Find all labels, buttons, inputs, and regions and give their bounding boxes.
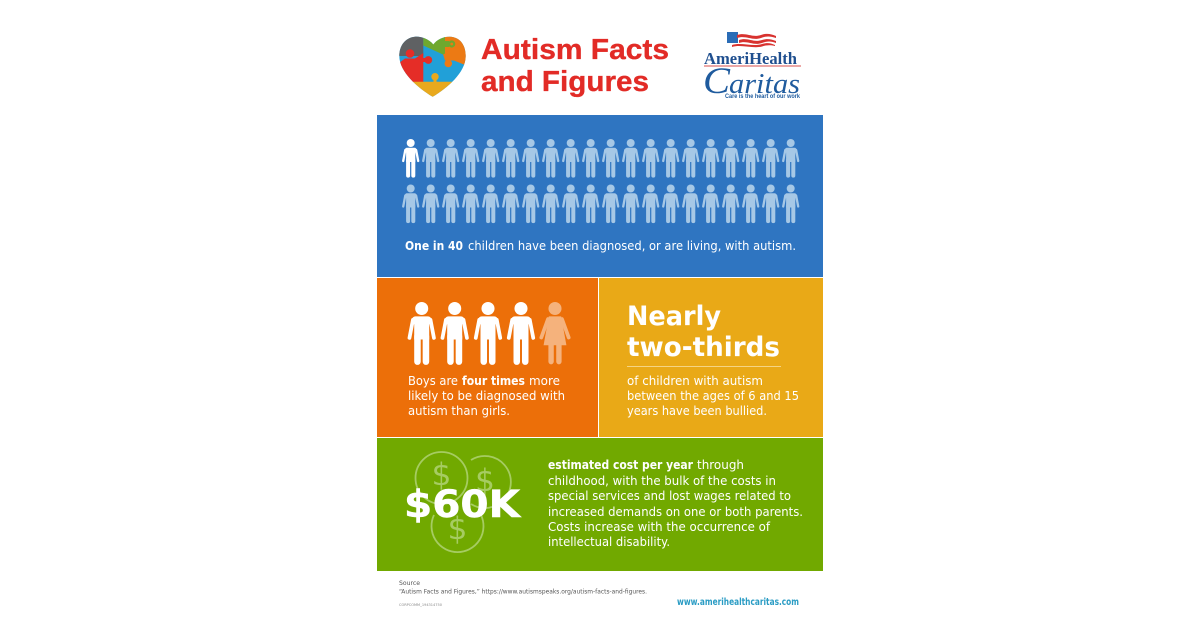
AmeriHealth Caritas logo: Care is the heart of our work — [725, 93, 800, 100]
AmeriHealth Caritas logo — [703, 32, 801, 102]
pictogram: 40 children — [403, 139, 798, 221]
text — [408, 373, 565, 418]
text: of children with autism — [627, 373, 763, 388]
text: increased demands on one or both parents. — [548, 504, 803, 519]
AmeriHealth Caritas logo: AmeriHealth — [704, 49, 797, 68]
title: and Figures — [481, 66, 649, 98]
puzzle piece: green — [423, 37, 449, 54]
text: four times — [462, 373, 525, 388]
icon: coins: $ — [475, 463, 495, 499]
flag — [727, 32, 776, 47]
puzzle piece: orange knob — [444, 60, 452, 67]
puzzle piece: green knob — [448, 40, 455, 48]
AmeriHealth Caritas logo: C — [703, 61, 731, 102]
text: special services and lost wages related to — [548, 488, 791, 503]
heading — [627, 301, 780, 363]
caption: children have been diagnosed, or are living, with autism. — [468, 238, 796, 253]
puzzle piece: red right knob — [423, 58, 425, 62]
pictogram: four boys and one girl — [409, 302, 569, 362]
icon: coins — [416, 452, 511, 552]
puzzle piece: yellow — [412, 82, 452, 97]
heading: two-thirds — [627, 332, 780, 363]
AmeriHealth Caritas logo: aritas — [729, 68, 800, 100]
heading: Nearly — [627, 301, 721, 332]
puzzle piece: grey — [399, 36, 424, 56]
footer: source: CORPCOMM_194314750 — [399, 603, 442, 607]
caption: One in 40 — [405, 238, 463, 253]
puzzle piece: yellow knob — [434, 80, 436, 82]
puzzle piece: red — [400, 53, 424, 82]
header logo: puzzle heart — [399, 36, 466, 97]
text: childhood, with the bulk of the costs in — [548, 473, 776, 488]
text — [548, 457, 803, 549]
text: Costs increase with the occurrence of — [548, 519, 771, 534]
footer: website: www.amerihealthcaritas.com — [677, 597, 799, 608]
panel: boys vs girls — [377, 278, 598, 437]
icon: coins: $ — [432, 457, 451, 493]
text — [627, 373, 799, 418]
text: more — [529, 373, 560, 388]
title — [481, 34, 669, 98]
text: between the ages of 6 and 15 — [627, 388, 799, 403]
icon: coins: $ — [448, 511, 467, 547]
text: autism than girls. — [408, 403, 510, 418]
panel: cost — [377, 438, 823, 571]
puzzle piece: orange cut-out of green knob — [450, 43, 453, 45]
puzzle piece: orange — [443, 36, 466, 65]
footer: source: Source — [399, 579, 420, 587]
puzzle piece: red top knob — [406, 49, 414, 58]
footer: source — [399, 579, 647, 607]
footer: source: “Autism Facts and Figures,” https://www.autismspeaks.org/autism-facts-and-figures. — [399, 588, 647, 596]
text: Boys are — [408, 373, 458, 388]
panel: bullied — [599, 278, 823, 437]
title: Autism Facts — [481, 34, 669, 66]
text: likely to be diagnosed with — [408, 388, 565, 403]
text: years have been bullied. — [627, 403, 767, 418]
big number: $60K — [404, 483, 521, 526]
text: through — [697, 457, 744, 472]
text: estimated cost per year — [548, 457, 694, 472]
text: intellectual disability. — [548, 534, 670, 549]
panel: one in 40 — [377, 115, 823, 277]
